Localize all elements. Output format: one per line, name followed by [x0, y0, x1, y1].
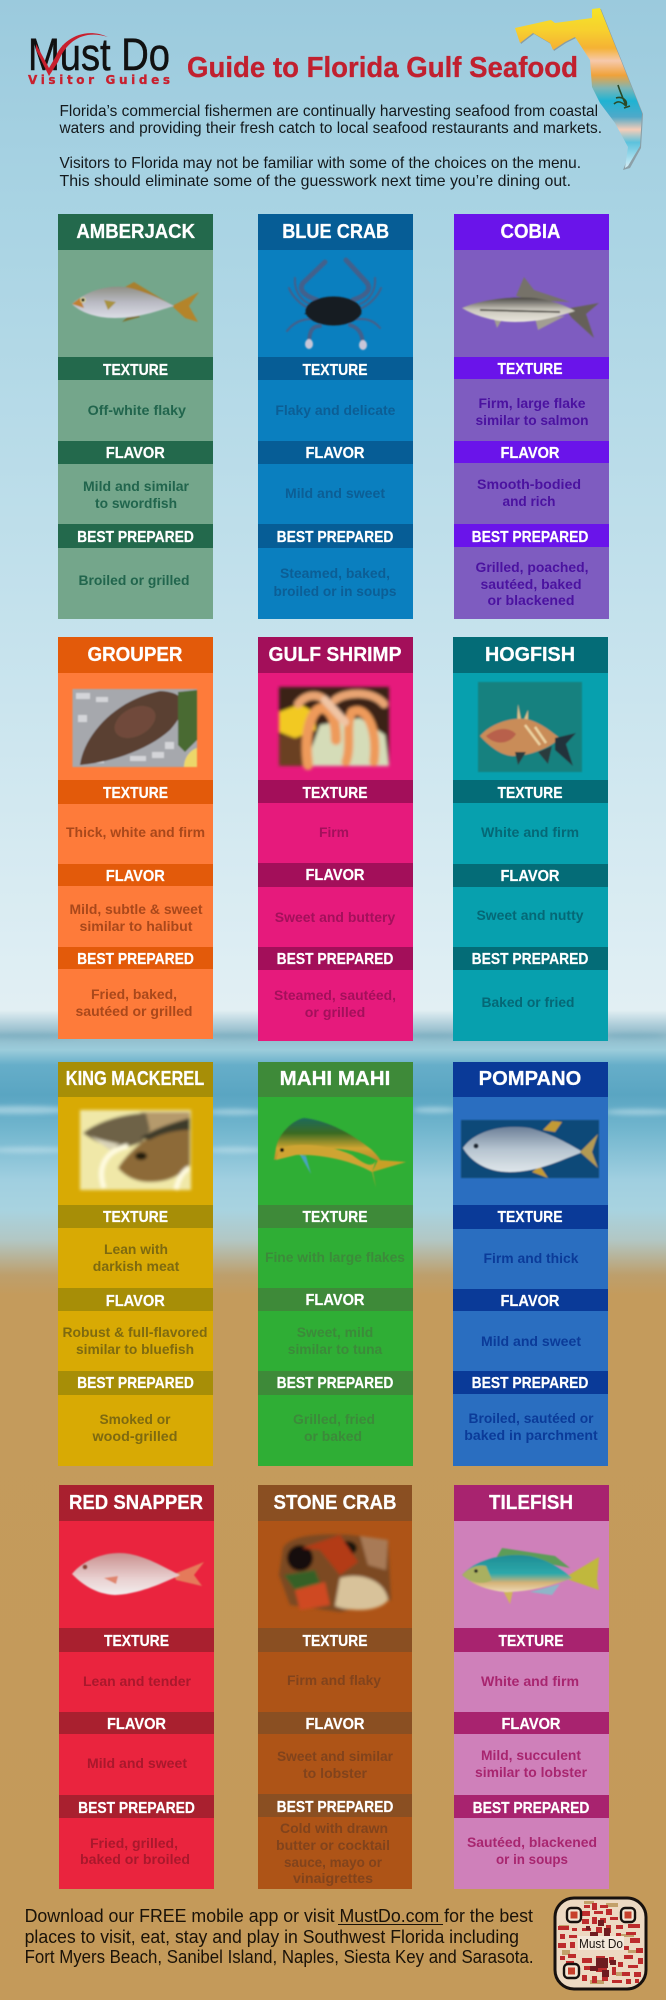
- best prepared text: Steamed, sautéed,: [274, 988, 396, 1004]
- texture text: Firm and thick: [484, 1251, 579, 1267]
- best prepared text: Grilled, poached,: [476, 560, 588, 576]
- best prepared text: or grilled: [305, 1005, 365, 1021]
- texture label: TEXTURE: [302, 785, 368, 802]
- best prepared text: sautéed or grilled: [76, 1004, 192, 1020]
- texture text: Firm: [319, 825, 349, 841]
- flavor text: [277, 1749, 393, 1782]
- best prepared text: [274, 566, 397, 600]
- flavor label: FLAVOR: [106, 868, 165, 885]
- icon: cobia fish: [462, 277, 599, 338]
- icon: shrimp photo: [279, 687, 389, 766]
- best prepared text: or blackened: [488, 593, 574, 609]
- texture label: TEXTURE: [103, 785, 168, 802]
- best prepared label: [58, 1371, 213, 1395]
- panel: Blue Crab: [258, 214, 413, 619]
- texture label: [58, 1205, 213, 1228]
- flavor text: Mild and sweet: [481, 1334, 581, 1350]
- flavor text: [477, 477, 581, 510]
- best prepared text: Broiled, sautéed or: [468, 1411, 594, 1427]
- texture text: Lean and tender: [83, 1674, 191, 1690]
- best prepared label: [258, 1794, 412, 1817]
- best prepared label: [58, 947, 213, 969]
- icon: Florida map: [515, 8, 643, 170]
- flavor label: [59, 1712, 214, 1734]
- texture text: similar to salmon: [476, 413, 588, 429]
- flavor label: FLAVOR: [306, 1716, 364, 1733]
- best prepared label: [453, 1371, 608, 1394]
- flavor label: FLAVOR: [306, 1292, 364, 1309]
- texture label: [258, 1628, 412, 1652]
- heading: STONE CRAB: [274, 1492, 396, 1514]
- best prepared text: Fried, grilled,: [90, 1836, 178, 1852]
- icon: pompano photo: [461, 1120, 599, 1178]
- texture label: [58, 357, 213, 380]
- flavor text: Sweet and similar: [277, 1749, 393, 1765]
- flavor text: Sweet and nutty: [476, 908, 584, 924]
- panel: Grouper: [58, 637, 213, 1039]
- flavor text: to lobster: [303, 1766, 367, 1782]
- best prepared label: BEST PREPARED: [78, 1800, 195, 1817]
- footer text: Fort Myers Beach, Sanibel Island, Naples, Siesta Key and Sarasota.: [25, 1946, 533, 1967]
- heading: [258, 1062, 413, 1097]
- heading: [258, 637, 413, 673]
- flavor label: FLAVOR: [500, 868, 560, 885]
- heading: HOGFISH: [485, 644, 575, 666]
- texture text: White and firm: [481, 825, 579, 841]
- best prepared text: Sautéed, blackened: [467, 1835, 597, 1851]
- best prepared label: [454, 1795, 609, 1818]
- flavor label: [454, 1712, 609, 1734]
- best prepared text: vinaigrettes: [293, 1871, 373, 1887]
- best prepared label: [258, 947, 413, 970]
- flavor text: Mild and similar: [83, 479, 189, 495]
- texture text: Lean with: [104, 1242, 168, 1258]
- heading: POMPANO: [479, 1068, 581, 1090]
- footer text: Download our FREE mobile app or visit MustDo.com for the best: [25, 1905, 534, 1926]
- best prepared label: BEST PREPARED: [472, 951, 588, 968]
- best prepared label: BEST PREPARED: [77, 951, 194, 968]
- texture label: TEXTURE: [498, 785, 562, 802]
- texture label: [58, 780, 213, 804]
- texture label: TEXTURE: [103, 362, 168, 379]
- texture text: Firm and flaky: [287, 1673, 381, 1689]
- best prepared label: BEST PREPARED: [472, 1375, 588, 1392]
- heading: [454, 1485, 609, 1521]
- best prepared text: Grilled, fried: [293, 1412, 375, 1428]
- flavor text: similar to bluefish: [76, 1342, 194, 1358]
- best prepared text: [276, 1821, 390, 1887]
- flavor label: [58, 441, 213, 464]
- intro paragraph 2: This should eliminate some of the guesswork next time you’re dining out.: [60, 173, 571, 190]
- texture text: darkish meat: [93, 1259, 180, 1275]
- icon: red snapper fish: [72, 1553, 204, 1595]
- texture label: [59, 1628, 214, 1652]
- flavor text: Smooth-bodied: [477, 477, 581, 493]
- icon: mahi mahi fish: [274, 1118, 406, 1188]
- heading: RED SNAPPER: [69, 1492, 204, 1514]
- panel: Hogfish: [453, 637, 608, 1041]
- heading: [59, 1485, 214, 1521]
- icon: blue crab: [287, 260, 381, 350]
- intro paragraph 2: [60, 155, 581, 190]
- flavor text: and rich: [502, 494, 556, 510]
- panel: Gulf Shrimp: [258, 637, 413, 1041]
- icon: grouper photo: [72, 689, 197, 767]
- best prepared text: Baked or fried: [482, 995, 574, 1011]
- intro paragraph 1: [59, 103, 602, 137]
- flavor text: Mild and sweet: [87, 1756, 187, 1772]
- icon: QR code: [555, 1898, 646, 1989]
- texture label: TEXTURE: [302, 362, 368, 379]
- flavor label: FLAVOR: [306, 445, 364, 462]
- intro paragraph 1: Florida’s commercial fishermen are continually harvesting seafood from coastal: [60, 103, 598, 120]
- texture text: Thick, white and firm: [66, 825, 205, 841]
- texture label: TEXTURE: [498, 1209, 562, 1226]
- texture text: Firm, large flake: [478, 396, 586, 412]
- heading: [58, 637, 213, 673]
- flavor label: [258, 1288, 413, 1311]
- texture label: TEXTURE: [302, 1633, 368, 1650]
- texture text: Off-white flaky: [88, 403, 186, 419]
- best prepared label: [258, 524, 413, 548]
- title: Guide to Florida Gulf Seafood: [187, 52, 578, 84]
- flavor label: FLAVOR: [500, 1293, 560, 1310]
- flavor text: similar to halibut: [80, 919, 193, 935]
- flavor text: Mild and sweet: [285, 486, 385, 502]
- heading: [454, 214, 609, 250]
- best prepared label: BEST PREPARED: [77, 1375, 194, 1392]
- best prepared text: [76, 987, 192, 1020]
- panel: Pompano: [453, 1062, 608, 1466]
- best prepared text: Broiled or grilled: [78, 573, 190, 589]
- best prepared text: [293, 1412, 375, 1445]
- texture label: TEXTURE: [498, 1633, 564, 1650]
- panel: Red Snapper: [59, 1485, 214, 1889]
- best prepared text: [467, 1835, 597, 1868]
- flavor label: FLAVOR: [306, 867, 364, 884]
- flavor label: [454, 441, 609, 463]
- panel: Amberjack: [58, 214, 213, 619]
- heading: [58, 1062, 213, 1097]
- flavor text: Mild, subtle & sweet: [70, 902, 203, 918]
- icon: stone crab photo: [279, 1534, 391, 1612]
- flavor text: to swordfish: [95, 496, 177, 512]
- logo: Must Do Visitor Guides: Visitor Guides: [28, 73, 170, 87]
- texture label: [258, 357, 413, 380]
- heading: BLUE CRAB: [282, 221, 389, 243]
- best prepared label: [454, 524, 609, 547]
- best prepared text: [80, 1836, 190, 1868]
- texture label: [453, 1205, 608, 1229]
- texture label: [258, 1205, 413, 1228]
- flavor text: similar to lobster: [475, 1765, 587, 1781]
- best prepared text: [476, 560, 588, 609]
- best prepared label: [258, 1371, 413, 1395]
- best prepared text: [464, 1411, 598, 1444]
- texture label: [454, 1628, 609, 1652]
- heading: [58, 214, 213, 250]
- logo: Must Do Visitor Guides: Must Do: [28, 29, 170, 80]
- heading: KING MACKEREL: [66, 1068, 204, 1090]
- flavor label: FLAVOR: [502, 1716, 560, 1733]
- best prepared label: BEST PREPARED: [277, 951, 393, 968]
- flavor label: FLAVOR: [106, 445, 165, 462]
- intro paragraph 2: Visitors to Florida may not be familiar with some of the choices on the menu.: [60, 155, 581, 172]
- texture label: TEXTURE: [302, 1209, 368, 1226]
- texture label: TEXTURE: [104, 1633, 169, 1650]
- flavor label: [58, 1288, 213, 1311]
- icon: king mackerel photo: [80, 1110, 191, 1190]
- flavor label: [58, 864, 213, 886]
- best prepared text: [91, 1412, 178, 1445]
- best prepared text: or in soups: [496, 1852, 568, 1868]
- icon: amberjack fish: [72, 282, 199, 322]
- flavor text: Sweet, mild: [297, 1325, 373, 1341]
- best prepared text: baked or broiled: [80, 1852, 190, 1868]
- best prepared label: [58, 524, 213, 548]
- flavor label: [258, 441, 413, 464]
- panel: King Mackerel: [58, 1062, 213, 1466]
- texture label: [258, 780, 413, 803]
- flavor text: [475, 1748, 587, 1781]
- best prepared text: Fried, baked,: [91, 987, 177, 1003]
- best prepared text: [274, 988, 396, 1021]
- flavor label: [258, 1712, 412, 1734]
- best prepared label: [453, 947, 608, 970]
- best prepared label: BEST PREPARED: [473, 1800, 589, 1817]
- panel: Stone Crab: [258, 1485, 412, 1889]
- heading: TILEFISH: [489, 1492, 573, 1514]
- heading: [258, 1485, 412, 1521]
- texture label: [453, 780, 608, 803]
- footer text: [25, 1905, 534, 1967]
- texture label: [454, 357, 609, 379]
- flavor text: Mild, succulent: [481, 1748, 581, 1764]
- flavor text: Robust & full-flavored: [62, 1325, 208, 1341]
- best prepared label: BEST PREPARED: [77, 529, 194, 546]
- texture text: White and firm: [481, 1674, 579, 1690]
- flavor text: [83, 479, 189, 512]
- best prepared text: Smoked or: [100, 1412, 171, 1428]
- texture label: TEXTURE: [498, 361, 562, 378]
- best prepared text: wood-grilled: [91, 1429, 178, 1445]
- heading: GULF SHRIMP: [268, 644, 402, 666]
- best prepared text: or baked: [304, 1429, 362, 1445]
- flavor label: FLAVOR: [106, 1293, 165, 1310]
- heading: [453, 637, 608, 673]
- flavor text: similar to tuna: [288, 1342, 382, 1358]
- panel: Mahi Mahi: [258, 1062, 413, 1466]
- best prepared text: baked in parchment: [464, 1428, 598, 1444]
- heading: [453, 1062, 608, 1097]
- texture text: Flaky and delicate: [275, 403, 395, 419]
- best prepared label: BEST PREPARED: [277, 1375, 393, 1392]
- best prepared text: Cold with drawn: [280, 1821, 388, 1837]
- flavor label: [258, 863, 413, 887]
- heading: GROUPER: [88, 644, 183, 666]
- flavor label: [453, 864, 608, 887]
- footer text: places to visit, eat, stay and play in Southwest Florida including: [25, 1926, 519, 1947]
- panel: Cobia: [454, 214, 609, 619]
- heading: AMBERJACK: [76, 221, 196, 243]
- texture text: [93, 1242, 180, 1275]
- flavor text: [62, 1325, 208, 1358]
- best prepared text: sautéed, baked: [480, 577, 582, 593]
- best prepared label: BEST PREPARED: [277, 529, 393, 546]
- heading: [258, 214, 413, 250]
- best prepared text: Steamed, baked,: [280, 566, 390, 582]
- panel: Tilefish: [454, 1485, 609, 1889]
- flavor text: Sweet and buttery: [275, 910, 395, 926]
- texture text: [476, 396, 588, 429]
- flavor text: [70, 902, 203, 935]
- heading: MAHI MAHI: [280, 1068, 390, 1090]
- best prepared text: broiled or in soups: [274, 584, 397, 600]
- icon: QR code: Must Do: [579, 1936, 623, 1951]
- icon: tilefish fish: [462, 1548, 599, 1604]
- best prepared label: BEST PREPARED: [472, 529, 588, 546]
- best prepared label: BEST PREPARED: [277, 1799, 393, 1816]
- best prepared text: sauce, mayo or: [284, 1855, 382, 1871]
- flavor text: [288, 1325, 382, 1358]
- flavor label: FLAVOR: [500, 445, 560, 462]
- flavor label: [453, 1289, 608, 1311]
- flavor label: FLAVOR: [107, 1716, 166, 1733]
- intro paragraph 1: waters and providing their fresh catch to local seafood restaurants and markets.: [59, 120, 602, 137]
- best prepared label: [59, 1795, 214, 1818]
- heading: COBIA: [500, 221, 560, 243]
- texture label: TEXTURE: [103, 1209, 168, 1226]
- icon: hogfish photo: [478, 682, 582, 772]
- texture text: Fine with large flakes: [265, 1250, 405, 1266]
- best prepared text: butter or cocktail: [276, 1838, 390, 1854]
